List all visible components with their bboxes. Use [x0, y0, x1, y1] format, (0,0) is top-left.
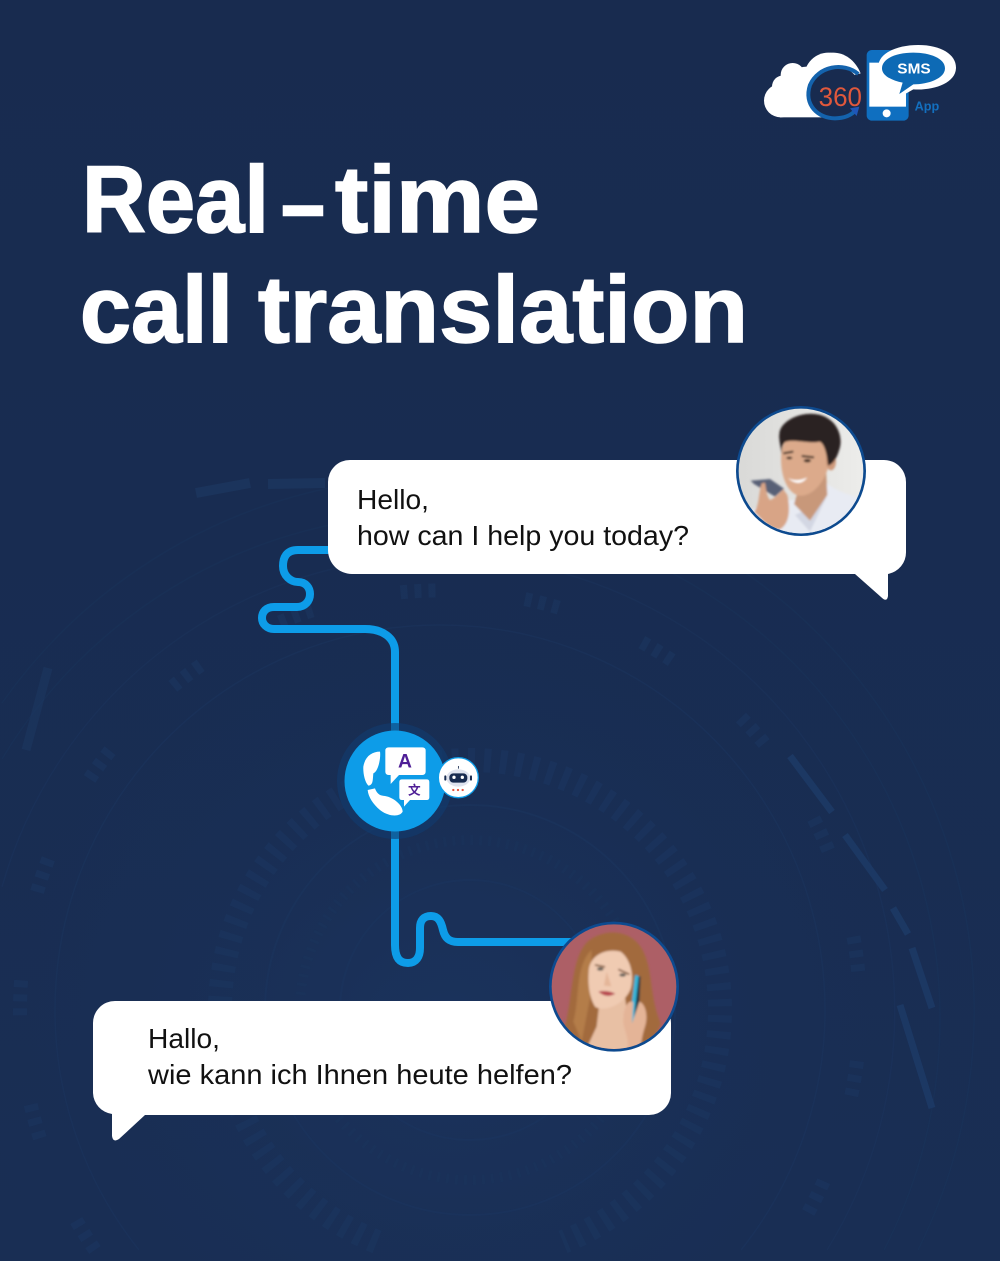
icon: phone and translation bubbles: 文 [408, 780, 421, 799]
title: translation [258, 257, 748, 363]
avatar: man with phone [736, 406, 866, 536]
speech bubble: English [328, 460, 906, 600]
icon: robot badge [438, 758, 478, 798]
logo App text: App [915, 100, 940, 114]
logo bubble inner [882, 53, 945, 94]
title: Real [82, 147, 269, 253]
german text: wie kann ich Ihnen heute helfen? [147, 1059, 572, 1090]
title: call [80, 257, 233, 363]
bubble shape [328, 460, 906, 600]
logo speech bubble [878, 45, 956, 98]
connector line [262, 550, 572, 963]
title: time [335, 147, 540, 253]
english text: Hello, [357, 484, 429, 515]
bubble shape [93, 1001, 671, 1140]
english text: how can I help you today? [357, 520, 689, 551]
german text [147, 1023, 572, 1090]
logo SMS text: SMS [897, 61, 931, 77]
logo arrowhead [850, 107, 859, 116]
title [80, 147, 748, 363]
speech bubble: German [93, 1001, 671, 1140]
logo phone button [883, 109, 891, 117]
hub halo [337, 723, 453, 839]
icon: phone and translation bubbles: A [398, 752, 412, 773]
icon: phone and translation bubbles [363, 747, 429, 815]
hub disc [344, 730, 446, 832]
logo ring [809, 66, 861, 118]
logo phone screen [869, 63, 906, 107]
avatar: woman with phone [549, 922, 679, 1052]
background tech pattern [0, 350, 1000, 1261]
logo phone [867, 50, 909, 121]
english text [357, 484, 689, 551]
logo cloud [764, 53, 861, 117]
logo 360 text: 360 [819, 82, 862, 112]
translation hub [337, 723, 478, 839]
german text: Hallo, [148, 1023, 220, 1054]
logo: 360 SMS App [764, 45, 956, 121]
title: – [281, 151, 325, 257]
